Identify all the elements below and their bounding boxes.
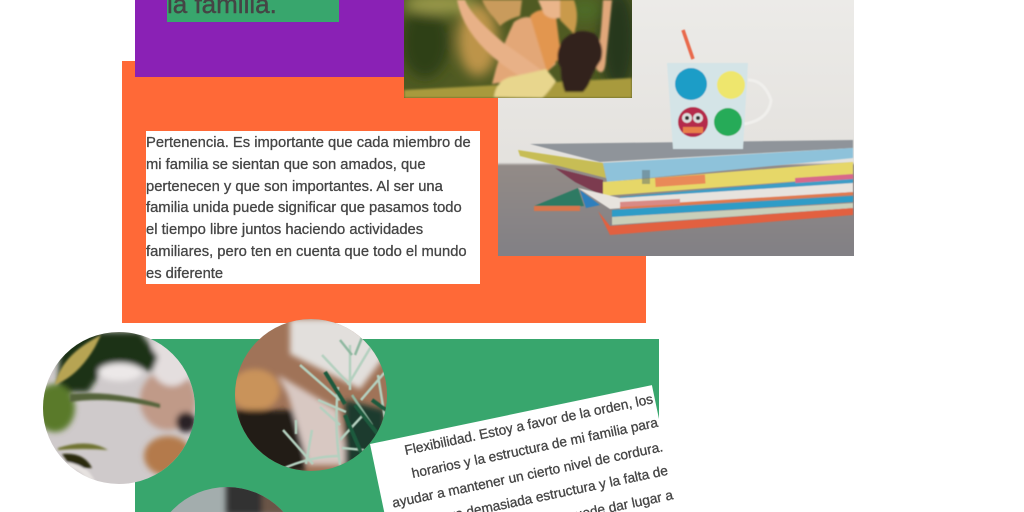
text block: pertenencia: mi familia se sientan que son amados, que xyxy=(146,157,426,173)
text block: pertenencia: familiares, pero ten en cuenta que todo el mundo xyxy=(146,244,467,260)
panel: purple header xyxy=(135,0,404,77)
text block: pertenencia: familia unida puede significar que pasamos todo xyxy=(146,200,462,216)
photo circle: plant and coffee xyxy=(43,332,195,484)
text block: flexibilidad, rotated xyxy=(370,385,678,512)
text block: pertenencia: Pertenencia. Es importante que cada miembro de xyxy=(146,135,471,151)
text block: flexibilidad, rotated: horarios y la estructura de mi familia para xyxy=(410,415,659,481)
heading: la familia xyxy=(167,0,339,22)
photo circle: rosemary and coffee xyxy=(235,319,387,471)
text block: pertenencia xyxy=(146,131,480,284)
text block: flexibilidad, rotated: Flexibilidad. Estoy a favor de la orden, los xyxy=(403,391,654,458)
text block: flexibilidad, rotated: ayudar a mantener un cierto nivel de cordura. xyxy=(391,439,664,510)
text block: pertenencia: el tiempo libre juntos haciendo actividades xyxy=(146,222,423,238)
photo circle: bottom cropped xyxy=(170,487,284,512)
panel: orange background xyxy=(122,61,646,323)
photo: mother and daughter in the grass xyxy=(404,0,632,98)
photo: books and mug xyxy=(498,0,854,256)
text block: pertenencia: es diferente xyxy=(146,266,223,282)
panel: green background xyxy=(135,339,659,512)
text block: pertenencia: pertenecen y que son importantes. Al ser una xyxy=(146,179,443,195)
